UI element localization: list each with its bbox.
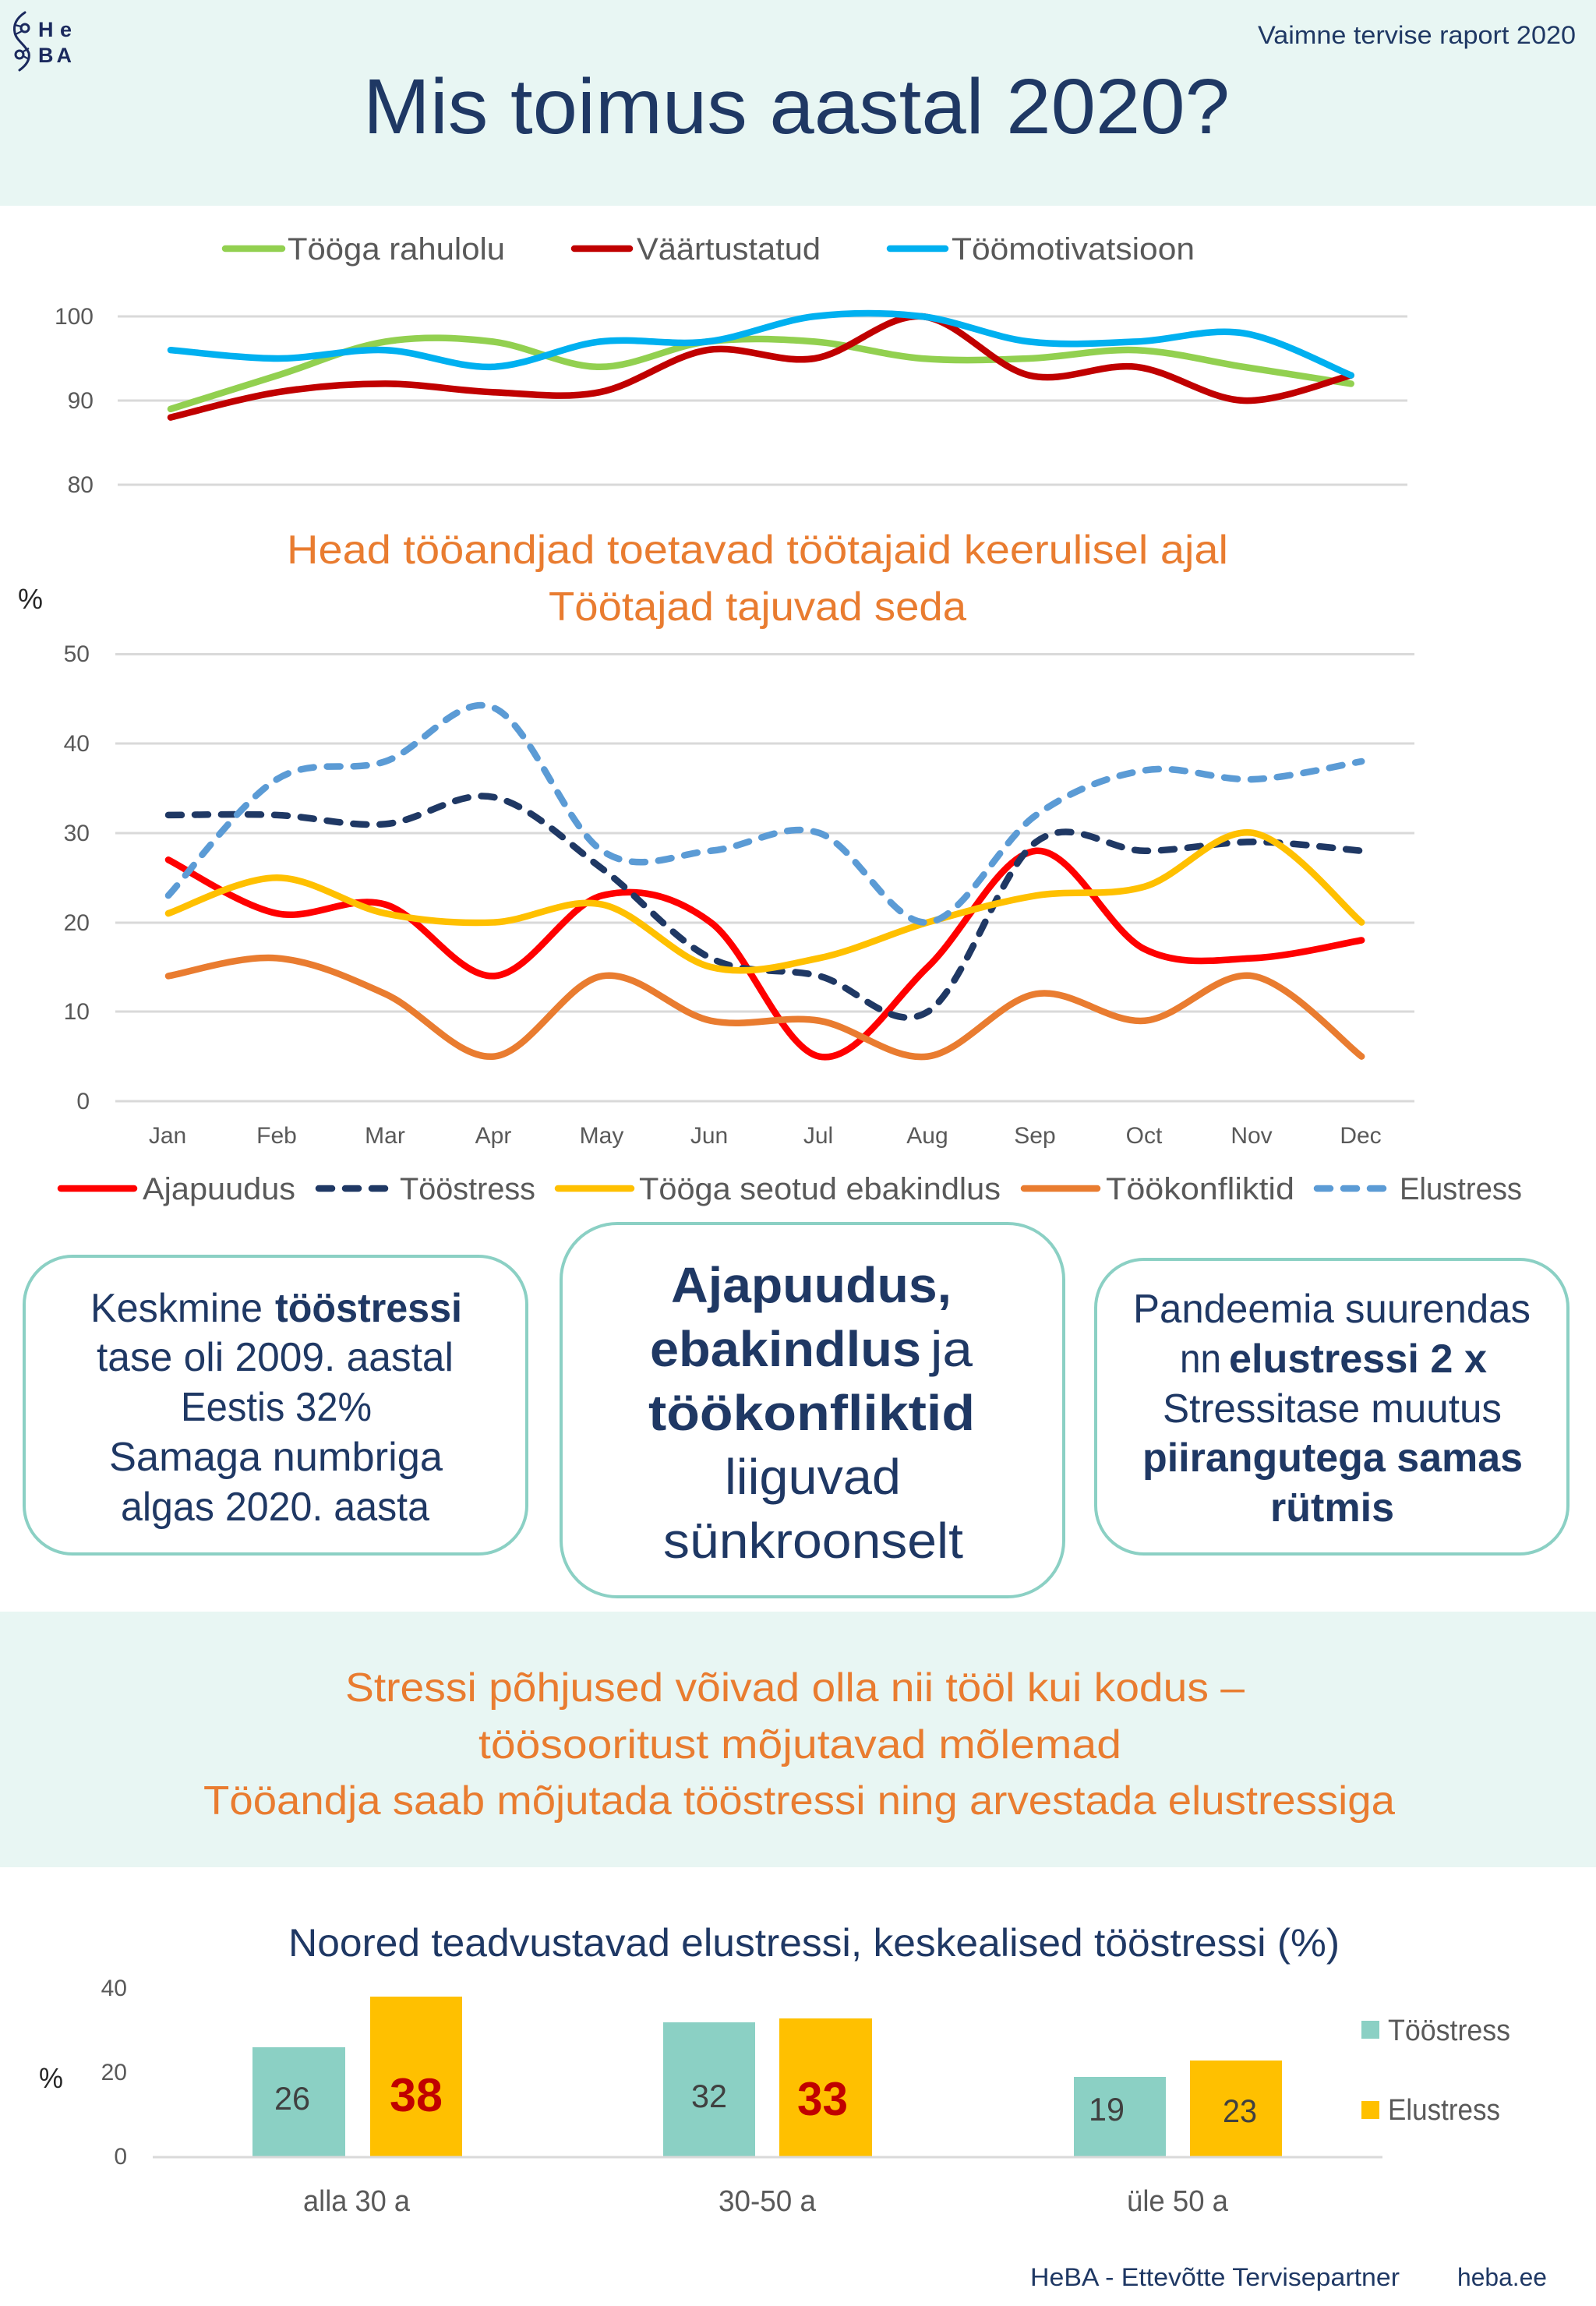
legend: top line chart [225, 232, 1195, 267]
callout: average work stress: tase oli 2009. aastal [97, 1335, 454, 1380]
bar chart: stress by age group: alla 30 a [303, 2185, 411, 2218]
callout: pandemic life stress: piirangutega samas [1142, 1436, 1523, 1481]
line chart: monthly stress factors: Jul [803, 1123, 833, 1149]
legend: monthly stress factors: Ajapuudus [143, 1172, 295, 1206]
callout: average work stress [24, 1256, 527, 1554]
bar chart title: Noored teadvustavad elustressi, keskealised tööstressi (%) [288, 1921, 1340, 1965]
logo: HeBA: BA [38, 44, 72, 67]
bar chart: stress by age group [39, 1976, 1382, 2218]
report label: Vaimne tervise raport 2020 [1258, 21, 1576, 49]
callout: pandemic life stress: rütmis [1270, 1485, 1394, 1531]
bar chart: stress by age group: 0 [114, 2144, 127, 2170]
callout: pandemic life stress: nn [1180, 1337, 1221, 1382]
line chart: satisfaction, valued, motivation: 90 [68, 388, 94, 414]
legend: monthly stress factors: Tööstress [400, 1172, 535, 1206]
line chart: monthly stress factors: Jun [690, 1123, 728, 1149]
heading: good employers [287, 528, 1228, 630]
line chart: satisfaction, valued, motivation [55, 304, 1407, 498]
legend: top line chart: Töömotivatsioon [952, 232, 1195, 267]
line chart: monthly stress factors: May [580, 1123, 623, 1149]
bars: over 50: 19 [1089, 2091, 1125, 2128]
logo: HeBA: He [38, 18, 72, 41]
line chart: monthly stress factors [18, 583, 1414, 1149]
bars: over 50: 23 [1223, 2092, 1257, 2129]
band: causes of stress: Stressi põhjused võivad olla nii tööl kui kodus – [345, 1665, 1245, 1711]
callout: pandemic life stress: Stressitase muutus [1163, 1386, 1502, 1432]
logo: HeBA [14, 12, 72, 70]
line chart: monthly stress factors: Oct [1126, 1123, 1163, 1149]
legend: bar chart [1361, 2015, 1510, 2127]
callout: pandemic life stress: Pandeemia suurendas [1133, 1287, 1531, 1332]
legend: top line chart: Tööga rahulolu [288, 232, 505, 267]
line chart: monthly stress factors: 40 [64, 731, 90, 757]
legend: monthly stress factors: Tööga seotud ebakindlus [639, 1172, 1001, 1206]
line chart: monthly stress factors: Sep [1014, 1123, 1056, 1149]
legend: monthly stress factors: Elustress [1400, 1172, 1522, 1206]
line chart: monthly stress factors: Aug [906, 1123, 948, 1149]
band: causes of stress: töösooritust mõjutavad mõlemad [478, 1722, 1121, 1767]
line chart: monthly stress factors: 30 [64, 821, 90, 846]
bar chart: stress by age group: 40 [101, 1976, 127, 2001]
bars: 30 to 50 [663, 2018, 872, 2156]
line chart: monthly stress factors: % [18, 583, 43, 615]
line chart: satisfaction, valued, motivation: 100 [55, 304, 94, 330]
bars: 30 to 50: 32 [691, 2078, 727, 2114]
callout: moving in sync: ebakindlus [650, 1321, 921, 1377]
callout: average work stress: Keskmine [90, 1286, 263, 1331]
footer: HeBA - Ettevõtte Tervisepartner [1030, 2263, 1400, 2291]
bar chart: stress by age group: 30-50 a [719, 2185, 817, 2218]
line chart: monthly stress factors: Dec [1340, 1123, 1382, 1149]
line chart: monthly stress factors: 20 [64, 910, 90, 936]
line chart: monthly stress factors: Nov [1231, 1123, 1273, 1149]
callout: moving in sync [561, 1224, 1064, 1597]
line chart: satisfaction, valued, motivation: 80 [68, 472, 94, 498]
bars: over 50 [1074, 2061, 1282, 2156]
band: causes of stress [0, 1612, 1596, 1867]
header band [0, 0, 1596, 206]
line chart: monthly stress factors: Feb [256, 1123, 297, 1149]
band: causes of stress: Tööandja saab mõjutada tööstressi ning arvestada elustressiga [203, 1778, 1395, 1824]
heading: good employers: Töötajad tajuvad seda [549, 584, 966, 630]
bars: under 30: 26 [274, 2080, 310, 2117]
bars: under 30 [252, 1997, 462, 2156]
callout: average work stress: algas 2020. aasta [121, 1485, 429, 1530]
bars: under 30: 38 [390, 2069, 443, 2121]
callout: average work stress: Samaga numbriga [109, 1435, 443, 1480]
legend: monthly stress factors: Töökonfliktid [1106, 1172, 1294, 1206]
callout: average work stress: Eestis 32% [181, 1385, 372, 1430]
bars: 30 to 50: 33 [797, 2073, 848, 2125]
callout: pandemic life stress [1096, 1259, 1568, 1554]
callout: pandemic life stress: elustressi 2 x [1229, 1337, 1487, 1382]
line chart: monthly stress factors: Mar [365, 1123, 405, 1149]
bar chart: stress by age group: % [39, 2062, 63, 2094]
callout: average work stress: tööstressi [275, 1286, 462, 1331]
line chart: monthly stress factors: Jan [149, 1123, 186, 1149]
callout: moving in sync: ja [929, 1321, 973, 1377]
callout: moving in sync: töökonfliktid [648, 1385, 975, 1441]
callout: moving in sync: Ajapuudus, [671, 1257, 952, 1313]
callout: moving in sync: liiguvad [725, 1449, 901, 1505]
title: Mis toimus aastal 2020? [363, 63, 1230, 150]
bar chart: stress by age group: üle 50 a [1127, 2185, 1229, 2218]
legend: bar chart: Elustress [1388, 2094, 1500, 2127]
legend: monthly stress factors [61, 1172, 1522, 1206]
heading: good employers: Head tööandjad toetavad töötajaid keerulisel ajal [287, 528, 1228, 573]
callout: moving in sync: sünkroonselt [663, 1513, 963, 1569]
bar chart: stress by age group: 20 [101, 2060, 127, 2085]
line chart: monthly stress factors: 10 [64, 999, 90, 1025]
line chart: monthly stress factors: Apr [475, 1123, 511, 1149]
legend: top line chart: Väärtustatud [637, 232, 821, 267]
legend: bar chart: Tööstress [1388, 2015, 1510, 2047]
line chart: monthly stress factors: 50 [64, 641, 90, 667]
line chart: monthly stress factors: 0 [76, 1089, 90, 1114]
footer: heba.ee [1457, 2263, 1547, 2291]
footer [1030, 2263, 1547, 2291]
